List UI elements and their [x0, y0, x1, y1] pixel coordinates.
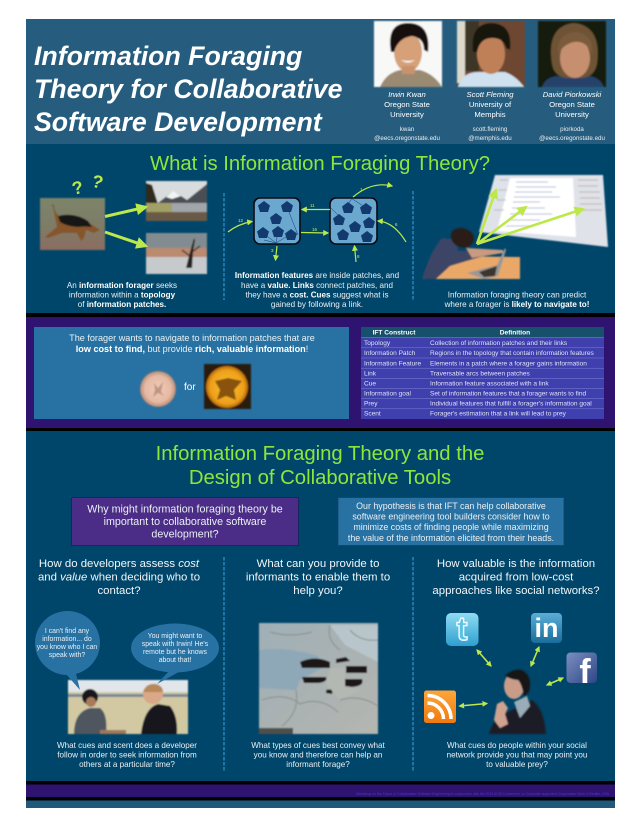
text: forager goal: The forager wants to navigate to information patches that are	[69, 333, 315, 343]
icon: question marks	[70, 171, 105, 199]
email: David Piorkowski: @eecs.oregonstate.edu	[539, 135, 605, 142]
divider: section 1 left	[223, 193, 225, 300]
link cost labels: 1	[360, 187, 363, 192]
speech bubble: informer question	[35, 611, 100, 690]
speech bubble: informant answer	[131, 624, 219, 684]
table rows: Collection of information patches and their links	[430, 340, 568, 347]
callout: why important: Why might information foraging theory be	[87, 504, 283, 516]
table rows: Link	[364, 370, 377, 378]
table header: Definition	[500, 330, 530, 336]
speech bubble: informant answer: speak with Irwin! He's	[142, 641, 209, 648]
link cost labels	[238, 187, 398, 259]
caption: cues and scent: others at a particular time?	[79, 760, 175, 769]
caption: prediction: Information foraging theory can predict	[448, 290, 587, 300]
links between patches	[228, 185, 406, 262]
table rows: Scent	[364, 410, 381, 418]
column: what to provide informants	[246, 558, 390, 769]
screenshot: code editor	[479, 175, 608, 247]
icon: Twitter: t	[456, 610, 468, 647]
caption: features, links and cues: Information features are inside patches, and	[235, 271, 399, 280]
caption: cues and scent: follow in order to seek information from	[57, 750, 197, 760]
icon: question marks: ?	[90, 171, 105, 193]
photo: Irwin Kwan	[374, 21, 442, 87]
table header: IFT Construct	[373, 330, 416, 336]
table rows: Forager's estimation that a link will lead to prey	[430, 410, 567, 418]
photo: two people talking	[68, 680, 188, 734]
email: David Piorkowski: piorkoda	[560, 126, 584, 133]
affiliation: Scott Fleming: Memphis	[474, 110, 506, 119]
heading: IFT and design: Information Foraging Theory and the	[156, 443, 484, 465]
speech bubble: informer question: I can't find any	[45, 628, 90, 635]
title: Theory for Collaborative	[34, 74, 343, 104]
arrow: person to RSS	[460, 704, 487, 706]
speech bubble: informer question: you know who I can	[37, 644, 97, 651]
photo: Scott Fleming	[457, 21, 525, 87]
caption: forager: information within a topology	[69, 290, 175, 300]
callout: why important: important to collaborative software	[104, 516, 266, 528]
panel: low cost rich information	[34, 327, 349, 419]
diagram: information patches and links	[228, 185, 406, 262]
callout: hypothesis: the value of the information elicited from their heads.	[348, 533, 554, 543]
link cost labels: 8	[357, 254, 360, 259]
icon: Twitter	[446, 610, 478, 647]
table rows: Topology	[364, 340, 391, 347]
caption: forager: An information forager seeks	[67, 281, 177, 290]
caption: network cues: network provide you that may point you	[447, 750, 587, 760]
table rows	[364, 340, 595, 418]
name: David Piorkowski: David Piorkowski	[543, 90, 602, 99]
link cost labels: 12	[238, 218, 244, 223]
divider: section 2 left	[223, 557, 225, 771]
arrow: forager to first patch	[105, 207, 146, 216]
affiliation: Irwin Kwan: University	[390, 110, 424, 119]
speech bubble: informant answer: about that!	[159, 657, 191, 664]
illustration: predicting navigation	[422, 175, 608, 279]
callout: why important	[72, 498, 298, 546]
panel: design of collaborative tools	[26, 431, 615, 781]
link cost labels: 6	[395, 222, 398, 227]
speech bubble: informer question: speak with?	[49, 652, 85, 659]
patch: left	[254, 198, 300, 244]
caption: network cues: What cues do people within your social	[447, 741, 587, 750]
table rows: Information Feature	[364, 360, 421, 368]
link cost labels: 11	[310, 203, 315, 208]
author: David Piorkowski	[538, 21, 606, 142]
arrow: forager to second patch	[105, 232, 146, 246]
question: enabling informants: What can you provide to	[257, 558, 379, 570]
question: cost and value: contact?	[97, 585, 141, 597]
divider: section 1 right	[412, 191, 414, 301]
callout: hypothesis: minimize costs of finding people while maximizing	[353, 522, 549, 532]
caption: types of cues: informant forage?	[286, 760, 350, 769]
photo: thinking man	[489, 670, 546, 734]
affiliation: Scott Fleming: University of	[469, 100, 512, 109]
email: Irwin Kwan: @eecs.oregonstate.edu	[374, 135, 440, 142]
question: cost and value: and value when deciding who to	[38, 572, 200, 584]
caption: network cues: to valuable prey?	[486, 760, 548, 769]
caption: features, links and cues: gained by following a link.	[271, 300, 363, 309]
question: cost and value: How do developers assess cost	[39, 558, 199, 570]
photo: mountain lake patch	[146, 181, 207, 221]
email: Scott Fleming: scott.fleming	[473, 126, 508, 133]
caption: types of cues: What types of cues best convey what	[251, 741, 386, 750]
email: Irwin Kwan: kwan	[400, 126, 415, 133]
photo: dead tree patch	[146, 233, 207, 274]
icon: Facebook	[566, 652, 597, 691]
photo: jigsaw puzzle	[259, 623, 378, 734]
table rows: Cue	[364, 380, 376, 388]
icon: Facebook: f	[579, 653, 591, 691]
callout: hypothesis	[338, 498, 564, 546]
table header	[373, 330, 530, 336]
column: social networks	[424, 558, 600, 769]
icon: question marks: ?	[70, 177, 85, 199]
band: cost and value	[26, 313, 615, 431]
header panel	[26, 19, 615, 144]
speech bubble: informant answer: You might want to	[148, 633, 202, 640]
arrow: to code	[477, 207, 526, 244]
photo: developer at laptop	[422, 228, 520, 279]
question: low-cost approaches: approaches like social networks?	[432, 585, 600, 597]
callout: hypothesis: software engineering tool builders consider how to	[352, 512, 550, 522]
heading: IFT and design: Design of Collaborative Tools	[189, 467, 451, 489]
name: Irwin Kwan: Irwin Kwan	[388, 90, 426, 99]
caption: cues and scent: What cues and scent does a developer	[57, 741, 197, 750]
link cost labels: 16	[312, 227, 318, 232]
table rows: Regions in the topology that contain information features	[430, 350, 595, 357]
affiliation: David Piorkowski: Oregon State	[549, 100, 595, 109]
panel: what is information foraging theory	[26, 144, 615, 313]
footer band	[26, 781, 615, 808]
arrow: to outline	[477, 209, 583, 244]
table: IFT constructs	[361, 327, 604, 419]
question: enabling informants: informants to enable them to	[246, 572, 390, 584]
question: enabling informants: help you?	[293, 585, 343, 597]
column: assessing cost and value	[35, 558, 219, 769]
icon: RSS	[424, 690, 456, 723]
name: Scott Fleming: Scott Fleming	[466, 90, 514, 99]
table rows: Information goal	[364, 390, 411, 398]
callout: hypothesis: Our hypothesis is that IFT can help collaborative	[356, 501, 546, 511]
table rows: Set of information features that a forager wants to find	[430, 390, 586, 398]
title: Information Foraging	[34, 41, 302, 71]
icon: LinkedIn: in	[534, 613, 558, 643]
footer credit text: Workshop on the Future of Collaborative Software Engineering in conjunction with the 2013 ACM Conference on Computer-supported Cooperative Work in Seattle, USA	[356, 792, 610, 796]
arrow: person to LinkedIn	[531, 647, 539, 666]
arrow: to file list	[477, 190, 496, 244]
link cost labels: 3	[271, 248, 274, 253]
caption: forager: of information patches.	[78, 300, 166, 309]
affiliation: Irwin Kwan: Oregon State	[384, 100, 430, 109]
illustration: forager and patches	[40, 171, 207, 274]
caption: types of cues: you know and therefore can help an	[254, 750, 382, 760]
heading: what is IFT: What is Information Foraging Theory?	[150, 153, 490, 175]
text: for: for	[184, 382, 196, 393]
speech bubble: informer question: information... do	[42, 636, 92, 643]
table rows: Information feature associated with a link	[430, 380, 549, 388]
caption: prediction: where a forager is likely to navigate to!	[445, 300, 589, 309]
text: forager goal: low cost to find, but provide rich, valuable information!	[76, 344, 308, 354]
caption: features, links and cues: they have a cost. Cues suggest what is	[245, 290, 389, 300]
question: low-cost approaches: acquired from low-cost	[459, 572, 574, 584]
table rows: Traversable arcs between patches	[430, 370, 531, 378]
icon: penny	[140, 371, 176, 407]
title	[34, 41, 343, 137]
photo: dog	[40, 198, 105, 250]
author: Irwin Kwan	[374, 21, 442, 142]
table rows: Information Patch	[364, 350, 416, 357]
title: Software Development	[34, 107, 323, 137]
arrow: person to Twitter	[477, 650, 491, 666]
callout: why important: development?	[151, 528, 219, 540]
patch: right	[330, 197, 377, 244]
speech bubble: informant answer: remote but he knows	[143, 649, 208, 656]
table rows: Prey	[364, 400, 378, 408]
table rows: Individual features that fulfill a forager's information goal	[430, 400, 592, 408]
author: Scott Fleming	[457, 21, 525, 142]
photo: David Piorkowski	[538, 21, 606, 87]
divider: section 2 right	[412, 557, 414, 771]
caption: features, links and cues: have a value. Links connect patches, and	[241, 281, 393, 290]
question: low-cost approaches: How valuable is the information	[437, 558, 595, 570]
icon: gold coin	[204, 364, 251, 409]
arrow: person to Facebook	[547, 678, 563, 685]
email: Scott Fleming: @memphis.edu	[468, 135, 512, 142]
affiliation: David Piorkowski: University	[555, 110, 589, 119]
table rows: Elements in a patch where a forager gains information	[430, 360, 587, 368]
